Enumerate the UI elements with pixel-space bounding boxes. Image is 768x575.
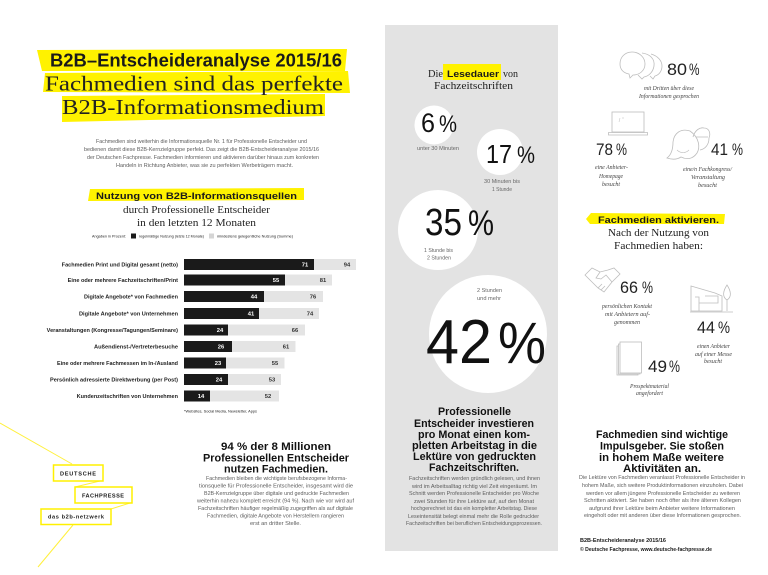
title — [37, 49, 350, 122]
stat: 44 %: einen Anbieter — [697, 344, 731, 350]
stat: 35 %: % — [468, 204, 494, 243]
stat: 78 %: % — [616, 140, 627, 159]
stat: 78 %: besucht — [602, 182, 620, 188]
chart heading — [88, 188, 304, 229]
row: Außendienst — [94, 341, 296, 352]
body text: Arbeitstag: Schnitt werden Professionelle Entscheider pro Woche — [409, 491, 539, 497]
body text — [196, 476, 355, 527]
stat: 80 %: % — [689, 60, 700, 79]
heading: Lesedauer: Fachzeitschriften — [434, 81, 513, 92]
heading: Fachmedien aktivieren — [586, 213, 725, 252]
stat: 41 %: Veranstaltung — [691, 175, 725, 181]
chart footnote: *Websites, Social Media, Newsletter, Apps — [184, 410, 257, 414]
bar chart — [47, 259, 356, 402]
row: Digitale Angebote Unternehmen: 74 — [307, 311, 314, 317]
row: Fachmedien gesamt: 71 — [302, 262, 309, 268]
body text: Impulsgeber: eingeholt oder mit anderen über diese Informationen gesprochen. — [584, 513, 741, 519]
heading: Arbeitstag: Entscheider investieren — [414, 418, 534, 430]
heading: Fachmedien aktivieren: Fachmedien haben: — [614, 241, 703, 252]
stat: 44 %: auf einer Messe — [695, 351, 732, 358]
stat: 41 %: besucht — [698, 183, 717, 189]
body text: Arbeitstag: Fachzeitschriften werden gründlich gelesen, und ihnen — [409, 476, 540, 482]
body text: Impulsgeber: werden vor allem jüngere Professionelle Entscheider zu weiteren — [585, 491, 740, 497]
body text: tionsquelle für Professionelle Entscheider, insgesamt wird die — [199, 484, 353, 490]
heading: Arbeitstag: Lektüre von gedruckten — [413, 451, 536, 463]
icon: brochure stack — [617, 342, 642, 375]
row: Digitale Angebote Unternehmen: Digitale Angebote* von Unternehmen — [79, 311, 178, 317]
row: Direktwerbung: 53 — [269, 377, 276, 383]
body text: Impulsgeber: Schritten aktiviert. Sie haben noch öfter als ihre älteren Kollegen — [584, 498, 741, 504]
stat: 17 % — [477, 129, 535, 193]
logo: Deutsche Fachpresse: DEUTSCHE — [60, 472, 96, 478]
heading: Impulsgeber: Impulsgeber. Sie stoßen — [600, 440, 724, 452]
row: Veranstaltungen — [47, 324, 305, 336]
stat: 6 %: 6 — [421, 108, 435, 138]
stat: 17 %: 30 Minuten bis — [484, 179, 520, 185]
row: Fachmedien gesamt: 94 — [344, 262, 351, 268]
logo: Deutsche Fachpresse: das b2b-netzwerk — [48, 514, 105, 520]
body text: Arbeitstag: zwei Stunden für ihre Lektüre auf, auf den Monat — [414, 499, 535, 505]
text block: 94 % — [196, 441, 355, 527]
row: Fachzeitschriften Print — [68, 274, 332, 286]
stat: 80 %: mit Dritten über diese — [644, 86, 694, 92]
stat: 49 %: Prospektmaterial — [629, 384, 669, 390]
footer credit: © Deutsche Fachpresse, www.deutsche-fachpresse.de — [580, 546, 712, 553]
row: Außendienst: 26 — [218, 344, 225, 350]
stat: 78 %: 78 — [596, 140, 613, 159]
body text: Arbeitstag: Leseintensität belegt einmal mehr die Rolle gedruckter — [408, 514, 539, 520]
stat: 42 %: 2 Stunden — [477, 288, 502, 294]
stat: 35 %: 35 — [425, 202, 462, 244]
heading: Lesedauer: von — [503, 69, 518, 80]
row: Direktwerbung — [50, 374, 281, 385]
stat: 42 %: 42 — [426, 308, 492, 377]
heading: Arbeitstag: Fachzeitschriften. — [429, 462, 519, 474]
chart legend: mindestens gelegentliche Nutzung (Summe) — [217, 234, 293, 238]
body text: Arbeitstag: wird im Arbeitsalltag richtig viel Zeit eingeräumt. Im — [411, 484, 538, 490]
body text: Impulsgeber: aufgrund ihrer Lektüre beim Anbieter weitere Informationen — [589, 506, 735, 512]
row: Fachmedien gesamt: Fachmedien Print und Digital gesamt (netto) — [62, 262, 178, 268]
body text: erst an dritter Stelle. — [250, 521, 301, 527]
row: Fachzeitschriften Print: Eine oder mehrere Fachzeitschriften/Print — [68, 278, 178, 284]
stat: 78 % — [595, 112, 648, 188]
logo: Deutsche Fachpresse: FACHPRESSE — [82, 494, 124, 500]
intro text: Handeln in Richtung Anbieter, was sie zu perfekten Werbeträgern macht. — [116, 163, 293, 169]
body text: Fachmedien bleiben die wichtigste berufsbezogene Informa- — [206, 476, 347, 482]
footer credit: B2B-Entscheideranalyse 2015/16 — [580, 538, 666, 544]
stat: 49 % — [617, 342, 680, 397]
stat: 49 %: % — [669, 357, 680, 376]
body text: B2B-Kernzielgruppe über digitale und gedruckte Fachmedien — [204, 491, 349, 497]
icon: speech bubbles — [620, 52, 662, 79]
title: Fachmedien sind das perfekte — [45, 72, 343, 96]
panel: Lesedauer — [385, 25, 558, 551]
body text: Impulsgeber: hohem Maße, sich weitere Produktinformationen einzuholen. Dabei — [582, 483, 743, 489]
heading: Arbeitstag: pletten Arbeitstag in die — [412, 440, 537, 452]
row: Direktwerbung: 24 — [216, 377, 223, 383]
stat: 17 %: 17 — [486, 139, 512, 169]
row: Digitale Angebote Fachmedien: 44 — [251, 295, 258, 301]
stat: 80 %: 80 — [667, 60, 687, 79]
row: Veranstaltungen: 24 — [217, 328, 224, 334]
row: Digitale Angebote Fachmedien: 76 — [310, 295, 317, 301]
stat: 44 % — [690, 285, 733, 365]
row: Direktwerbung: Persönlich adressierte Direktwerbung (per Post) — [50, 377, 178, 383]
stat: 6 %: unter 30 Minuten — [417, 146, 459, 152]
heading: Fachmedien aktivieren: Nach der Nutzung von — [608, 228, 709, 239]
row: Digitale Angebote Unternehmen: 41 — [248, 311, 255, 317]
stat: 66 %: 66 — [620, 278, 638, 297]
heading: Arbeitstag — [412, 406, 537, 474]
heading: Impulsgeber: Aktivitäten an. — [623, 463, 701, 475]
body text: Arbeitstag — [406, 476, 542, 527]
stat: 6 % — [414, 106, 459, 152]
stat: 44 %: 44 — [697, 318, 715, 337]
stat: 49 %: 49 — [648, 357, 667, 376]
heading: Lesedauer: Die — [428, 69, 444, 80]
row: Veranstaltungen: Veranstaltungen (Kongresse/Tagungen/Seminare) — [47, 328, 178, 334]
heading: Lesedauer: Lesedauer — [447, 69, 499, 80]
chart legend — [92, 234, 293, 238]
logo: Deutsche Fachpresse — [0, 423, 132, 567]
stat: 42 %: und mehr — [477, 296, 501, 302]
row: Kundenzeitschriften — [77, 390, 279, 402]
stat: 41 % — [667, 128, 743, 189]
stat: 41 %: 41 — [711, 140, 728, 159]
stat: 66 %: mit Anbietern auf- — [605, 311, 650, 318]
stat: 42 %: % — [498, 311, 546, 376]
row: Fachmessen — [57, 358, 284, 368]
icon: laptop — [608, 112, 648, 135]
icon: faces — [667, 128, 710, 159]
row: Fachzeitschriften Print: 55 — [273, 278, 280, 284]
heading: 94 % der 8 Millionen — [221, 441, 331, 453]
heading: Professionellen Entscheider — [203, 452, 350, 464]
title: B2B–Entscheideranalyse 2015/16 — [50, 51, 342, 71]
row: Fachmessen: 23 — [215, 361, 222, 367]
title: B2B-Informationsmedium — [62, 95, 324, 119]
stat: 41 %: % — [732, 140, 743, 159]
body text: weiterhin nahezu komplett erreicht (94 %). Nach wie vor wird auf — [196, 498, 355, 504]
icon: handshake — [585, 268, 620, 292]
row: Digitale Angebote Fachmedien: Digitale Angebote* von Fachmedien — [84, 295, 178, 301]
heading: Arbeitstag: Professionelle — [438, 406, 511, 418]
stat: 42 % — [426, 275, 547, 393]
intro text: bedienen damit diese B2B-Kernzielgruppe perfekt. Das zeigt die B2B-Entscheideranalyse 2015/16 — [84, 147, 319, 153]
stat: 66 %: genommen — [614, 320, 640, 326]
intro text: der Deutschen Fachpresse. Fachmedien informieren und aktivieren darüber hinaus zum konkreten — [87, 155, 319, 161]
stat: 66 %: % — [642, 278, 653, 297]
stat: 41 %: eine/n Fachkongress/ — [683, 167, 733, 173]
footer credit — [580, 538, 712, 553]
stat: 35 %: 1 Stunde bis — [424, 248, 453, 254]
row: Kundenzeitschriften: 14 — [198, 394, 205, 400]
body text: Fachmedien, digitale Angebote von Herstellern rangieren — [207, 514, 344, 520]
heading — [203, 441, 350, 476]
heading: Lesedauer — [428, 64, 518, 92]
row: Außendienst: 61 — [283, 344, 290, 350]
heading: Impulsgeber: in hohem Maße weitere — [599, 452, 724, 464]
row: Fachzeitschriften Print: 81 — [320, 278, 327, 284]
stat: 78 %: eine Anbieter- — [595, 165, 628, 171]
chart legend: Angaben in Prozent: — [92, 234, 126, 238]
stat: 49 %: angefordert — [636, 390, 663, 397]
stat: 44 %: % — [718, 318, 730, 337]
stat: 78 %: Homepage — [598, 174, 623, 180]
chart heading: durch Professionelle Entscheider — [123, 205, 271, 216]
body text: Impulsgeber: Die Lektüre von Fachmedien veranlasst Professionelle Entscheider in — [579, 475, 745, 481]
intro text — [84, 139, 319, 169]
intro text: Fachmedien sind weiterhin die Informationsquelle Nr. 1 für Professionelle Entscheider und — [96, 139, 307, 145]
stat: 6 %: % — [439, 111, 457, 138]
heading: Arbeitstag: pro Monat einen kom- — [418, 429, 530, 441]
heading: Impulsgeber — [596, 429, 728, 475]
chart heading: in den letzten 12 Monaten — [137, 218, 256, 229]
chart heading: Nutzung von B2B-Informationsquellen — [96, 191, 297, 202]
row: Außendienst: Außendienst-/Vertreterbesuche — [94, 344, 178, 350]
row: Fachmessen: 55 — [272, 361, 279, 367]
row: Fachmessen: Eine oder mehrere Fachmessen im In-/Ausland — [57, 361, 178, 367]
body text: Arbeitstag: Fachzeitschriften bei beruflichen Entscheidungsprozessen. — [406, 521, 542, 527]
chart legend: regelmäßige Nutzung (letzte 12 Monate) — [139, 234, 204, 238]
row: Fachmedien gesamt — [62, 259, 356, 270]
stat: 66 %: persönlichen Kontakt — [601, 304, 652, 310]
heading: nutzen Fachmedien. — [224, 464, 328, 476]
body text: Arbeitstag: hochgerechnet ist das ein kompletter Arbeitstag. Diese — [411, 506, 537, 512]
row: Kundenzeitschriften: Kundenzeitschriften von Unternehmen — [77, 394, 178, 400]
heading: Fachmedien aktivieren: Fachmedien aktivieren. — [598, 215, 719, 226]
stat: 80 %: Informationen gesprochen — [638, 93, 699, 100]
heading: Impulsgeber: Fachmedien sind wichtige — [596, 429, 728, 441]
row: Digitale Angebote Unternehmen — [79, 308, 319, 319]
stat: 66 % — [585, 268, 653, 326]
stat: 35 %: 2 Stunden — [427, 256, 451, 262]
row: Kundenzeitschriften: 52 — [265, 394, 271, 400]
row: Veranstaltungen: 66 — [292, 328, 299, 334]
stat: 17 %: % — [517, 142, 535, 169]
stat: 80 % — [620, 52, 700, 100]
stat: 17 %: 1 Stunde — [492, 187, 512, 193]
icon: trade fair building — [690, 285, 733, 312]
body text: Fachzeitschriften häufiger regelmäßig zugegriffen als auf digitale — [198, 506, 353, 512]
body text: Impulsgeber — [579, 475, 745, 519]
stat: 44 %: besucht — [704, 359, 722, 365]
row: Digitale Angebote Fachmedien — [84, 291, 323, 302]
stat: 35 % — [398, 190, 494, 270]
